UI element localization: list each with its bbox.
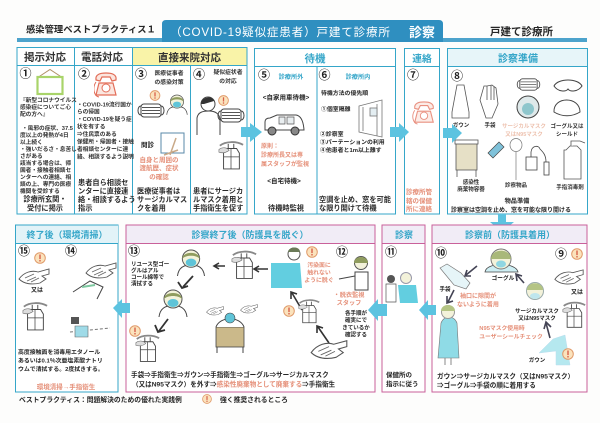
red staff label [334,291,365,307]
icon: warning [284,306,294,316]
label masks: 又はN95マスク [518,314,556,322]
icon: patient [197,97,220,135]
icon: warning [307,247,317,257]
step 6 inside clinic: ⑥ [318,68,331,82]
phone text: 者相談センターに連 [77,145,128,153]
icon: warning [150,91,160,100]
title: best practice label: 感染管理ベストプラクティス１ [26,24,156,34]
notice text: 感染症についてご心 [20,103,71,111]
options 2 to 4: ②診察室 [320,130,344,138]
options 2 to 4: ④他患者と1m以上離す [320,146,382,154]
icon: gown [452,85,469,118]
equipment labels row 2: 診察物品 [505,181,527,189]
goggle note: リユース型ゴー [131,260,169,268]
red note seal check [479,324,543,340]
step 5 outside clinic [258,68,309,212]
figure: waste bin and gloves [207,305,257,353]
red label masks: 又はN95マスク [505,130,543,138]
cleaning instruction: あるいは0.1％次亜塩素酸ナトリ [18,356,103,364]
equipment labels row 2 [457,178,584,193]
red note: 渡航歴、症状 [140,163,179,172]
red note: 所に連絡 [406,204,432,213]
panel: contact [404,48,440,214]
staff conclusion: サージカルマス [137,195,187,204]
label masks [515,307,559,322]
icon: stethoscope [526,146,549,175]
phone conclusion: 患者自ら相談セ [78,178,128,187]
arrow set [214,263,329,343]
notice text: 度以上の発熱が4日 [20,131,69,139]
label outside: 診療所外 [279,73,304,81]
red note sleeve [457,292,499,308]
notice text: 国者・接触者相談セ [20,166,71,174]
monitor note [342,309,370,338]
patient conclusion: ルマスク着用と [193,195,243,204]
equipment labels row 2: 感染性 [463,178,480,186]
staff conclusion: 医療従事者は [137,186,180,196]
step 3 staff: ③ [135,67,147,81]
donning sequence [437,372,574,390]
footnote: best practice definition: ベストプラクティス：問題解決のための優れた実践例 [19,395,182,404]
icon: sanitizer [136,336,159,361]
phone conclusion: ンターに直接連 [78,186,128,196]
legend: strongly recommended [203,395,288,404]
label or: 又は [571,289,583,296]
panel: after finish cleaning [16,225,118,392]
red note [406,187,432,213]
figure: removing gown [271,248,302,288]
notice text: 談の上、専門の医療 [20,180,71,188]
phone conclusion: 絡・相談するよう [78,195,136,204]
goggle note: 清拭する [131,280,153,288]
step 3 staff [135,67,187,212]
figure: full gown [438,305,459,365]
notice text: ・強いだるさ・息苦し [20,145,77,153]
phone text: 保健所・帰国者・接触 [77,138,134,146]
waiting monitor: 待機時監視 [268,204,305,212]
panel: exam [382,225,425,392]
heading: waiting: 待機 [304,52,326,65]
icon: thermometer device [488,142,504,158]
cleaning instruction [18,348,104,373]
label gloves: 手袋 [439,285,451,293]
phone text: 状を有する [77,122,105,130]
heading: after cleaning: 終了後（環境清掃） [26,229,108,240]
step 2 phone: ② [78,67,90,81]
options 2 to 4 [320,130,385,154]
step 3 heading [154,69,184,86]
icon: surgical mask [517,79,540,90]
panel: direct response group [17,48,247,214]
phone text: 絡、相談するよう説明 [77,152,134,160]
notice text: さがある [20,152,43,160]
priority text: 待機方法の優先順 [321,89,368,97]
label gown: ガウン [529,356,546,364]
figure: goggles [485,249,518,272]
arrow: to pre-exam [490,214,514,232]
patient conclusion [193,186,243,212]
phone text: ・COVID-19を疑う症 [77,115,132,123]
arrow: to exam finish [368,299,387,321]
icon: warning [130,326,140,336]
icon: hand washing [19,269,49,284]
step 7 number: ⑦ [407,68,419,82]
icon: warning [572,249,582,259]
notice conclusion: 受付に掲示 [27,204,63,212]
panel: exam preparation [448,48,588,214]
notice conclusion [23,194,67,212]
icon: sanitizer [299,300,319,323]
step 11: ⑪ [385,245,397,259]
waiting conclusion: 空調を止め、窓を可能 [319,195,392,204]
equipment labels row 1: 手袋 [484,121,496,129]
phone text: ⇒住民票のある [77,130,117,138]
red note: rule: 診療所長又は専 [261,151,303,159]
arrows between figures [155,276,193,332]
step 5 outside clinic: ⑤ [258,68,270,82]
icon: stethoscope loop [510,138,522,180]
arrow: to contact [390,123,409,142]
step 12: ⑫ [336,245,348,259]
red label masks [502,122,546,138]
staff conclusion: クを着用 [137,204,166,212]
icon: n95 mask [517,96,539,118]
step 3 heading: の感染対策 [154,78,184,86]
patient conclusion: 患者にサージカ [193,186,243,196]
panel: waiting [254,48,396,214]
step 3 heading: 医療従事者 [154,69,184,77]
icon: hand wash [555,270,583,284]
icon: sanitizer [563,303,585,327]
patient conclusion: 手指衛生を促す [193,204,243,212]
step 4 heading: 疑似症状者 [214,68,243,76]
red note seal check: ユーザーシールチェック [479,332,543,340]
step 1 notice: ① [20,66,32,80]
notice conclusion: 診療所玄関・ [23,194,67,204]
icon: warning [563,349,573,359]
red note: 轄の保健 [406,196,432,205]
equipment labels row 2: 廃棄物容器 [457,185,485,193]
goggle note [131,260,169,288]
red note: 触れない [307,268,331,276]
step 14: ⑭ [65,244,77,258]
icon: warning [219,96,228,105]
icon: telephone [413,102,433,124]
option 1: ①個室隔離 [321,105,351,113]
step 4 heading [214,68,243,85]
red note sleeve: 袖口に隙間が [460,292,496,300]
heading: phone: 電話対応 [81,50,123,64]
options 2 to 4: ③パーテーションの利用 [320,138,385,146]
red note: 自身と周囲の [140,155,179,164]
notice text: 『新型コロナウイルス [20,96,77,104]
red staff label: スタッフ [337,299,361,307]
step 15: ⑮ [18,244,30,258]
step 2 phone [77,67,136,212]
donning sequence: ⇒ゴーグル⇒手袋の順に着用する [437,380,536,390]
phone conclusion [78,178,136,212]
red note: ように脱ぐ [304,276,334,284]
figure: doctor and patient [386,272,418,303]
notice text: ・風邪の症状、37.5 [22,124,73,132]
red note sleeve: ないように着用 [457,300,499,308]
equipment labels row 1: ゴーグル又は [550,122,584,130]
label goggles: ゴーグル [492,274,515,282]
equipment labels row 1 [453,121,584,138]
figure: monitor staff [339,256,368,290]
icon: hand wash [311,341,347,358]
icon: warning [35,253,45,263]
icon: goggles [554,80,582,91]
step 8 number: ⑧ [451,69,463,83]
heading: removing PPE: 診察終了後（防護具を脱ぐ） [191,229,309,240]
exam note [386,370,418,388]
monitor note: きているか [342,324,370,332]
removal sequence: 手袋⇒手指衛生⇒ガウン⇒手指衛生⇒ゴーグル⇒サージカルマスク [131,370,329,379]
heading: notice: 掲示対応 [24,50,66,64]
notice text [20,96,77,195]
icon: sanitizer bottle [564,141,585,179]
goggle note: コール綿等で [131,273,165,281]
icon: face shield [554,100,580,116]
title banner: （COVID-19疑似症患者）戸建て診療所 [170,25,390,39]
notice text: 配の方へ』 [20,110,48,118]
icon: gloves [480,85,498,118]
red note: 環境清掃→手指衛生 [37,382,96,391]
equipment labels row 1: シールド [556,132,578,138]
figure: gown [539,335,570,365]
heading: direct visit: 直接来院対応 [158,51,221,64]
arrow: to waiting [241,123,262,142]
red note: rule [261,142,309,168]
label car waiting: <自家用車待機> [263,92,309,102]
icon: hand sanitizer [219,142,243,169]
icon: surgical mask [138,104,164,117]
arrow: to after exam [113,299,130,318]
step 4 heading: の対応 [219,77,237,85]
red note: rule: 原則： [261,142,279,150]
step 13: ⑬ [128,244,140,258]
equipment labels row 1: ガウン [453,121,470,129]
icon: door [359,100,382,137]
waiting conclusion [319,195,392,212]
monitor note: 各手順が [345,309,367,317]
label home waiting: <自宅待機> [267,176,301,185]
phone conclusion: 指示 [78,204,92,212]
figure: gloved hand [440,264,470,289]
phone text [77,100,134,160]
red note [140,155,179,181]
exam note: 保健所の [386,370,412,379]
icon: tablet [161,133,184,155]
label inside: 診療所内 [346,73,370,81]
goggle note: グルはアル [131,266,159,274]
red note: 汚染面に [307,261,331,269]
icon: sanitizer top [232,252,256,278]
monitor note: 確実にで [345,316,367,324]
arrow: to preparation [443,124,462,143]
waiting conclusion: な限り開けて待機 [319,204,377,212]
red note seal check: N95マスク使用時 [479,324,525,332]
exam note: 指示に従う [386,379,418,388]
label masks: サージカルマスク [515,307,559,315]
red note [304,261,334,284]
icon: wiping [73,281,103,299]
step 4 patient: ④ [193,68,205,82]
donning sequence: ガウン⇒サージカルマスク（又はN95マスク） [437,372,574,380]
figure: mask [526,282,544,300]
step 6 inside clinic [318,68,392,212]
icon: notice board [37,70,63,94]
icon: sanitizer [23,303,47,330]
legend: strongly recommended: 強く推奨されるところ [220,395,288,404]
removal sequence [131,370,336,388]
title banner: 診察 [409,25,435,40]
staff conclusion [137,186,187,212]
cleaning instruction: 高度接触面を消毒用エタノール [18,348,100,356]
icon: car [265,115,304,135]
step 4 patient [193,68,244,212]
figure: removing mask [159,290,187,317]
notice text: 該当する場合は、帰 [20,159,71,167]
step 1 notice [20,66,77,212]
icon: gloved hand [86,263,116,278]
notice text: ンターへの連絡、相 [20,173,71,181]
cleaning instruction: ウムで清拭する。2度拭きする。 [18,365,104,373]
step 9: ⑨ [555,247,567,261]
label: interview: 問診 [141,140,154,149]
equipment labels row 2: 手指消毒剤 [556,183,584,191]
title banner [17,20,587,42]
heading: contact: 連絡 [412,52,432,65]
red label masks: サージカルマスク [502,122,546,130]
icon: cleaning staff [70,317,110,337]
heading: exam: 診察 [395,229,413,240]
label or: 又は [31,287,43,294]
figure: removing goggles [178,250,204,276]
panel: before exam putting on PPE [432,225,587,392]
step 10: ⑩ [435,246,447,260]
notice text: 機関を受診する [20,187,60,195]
arrow: to exam [419,300,436,320]
red note: の確認 [149,172,169,181]
removal sequence: （又はN95マスク）を外す⇒感染性廃棄物として廃棄する⇒手指衛生 [132,380,336,388]
icon: staff head [167,95,187,115]
panel: after exam removing PPE [126,225,375,392]
notice text: 以上続く [20,138,43,146]
icon: red telephone [94,73,116,97]
heading: putting on PPE: 診察前（防護具着用） [465,229,555,240]
icon: mask [218,109,244,122]
subtitle: detached clinic: 戸建て診療所 [490,25,553,38]
icon: waste bin [455,140,478,177]
phone text: らの帰国 [77,108,100,116]
red staff label: ・脱衣監視 [334,291,365,299]
supplies title: 物品準備 [505,197,529,205]
supplies note: 診察室は空調を止め、窓を可能な限り開ける [451,206,571,214]
monitor note: 確認する [345,330,367,338]
heading: preparation: 診察準備 [498,52,538,65]
arrows [447,266,551,338]
red note: rule: 属スタッフが監視 [261,160,309,168]
phone text: ・COVID-19流行国か [77,100,132,108]
red note: 診療所管 [406,187,432,196]
